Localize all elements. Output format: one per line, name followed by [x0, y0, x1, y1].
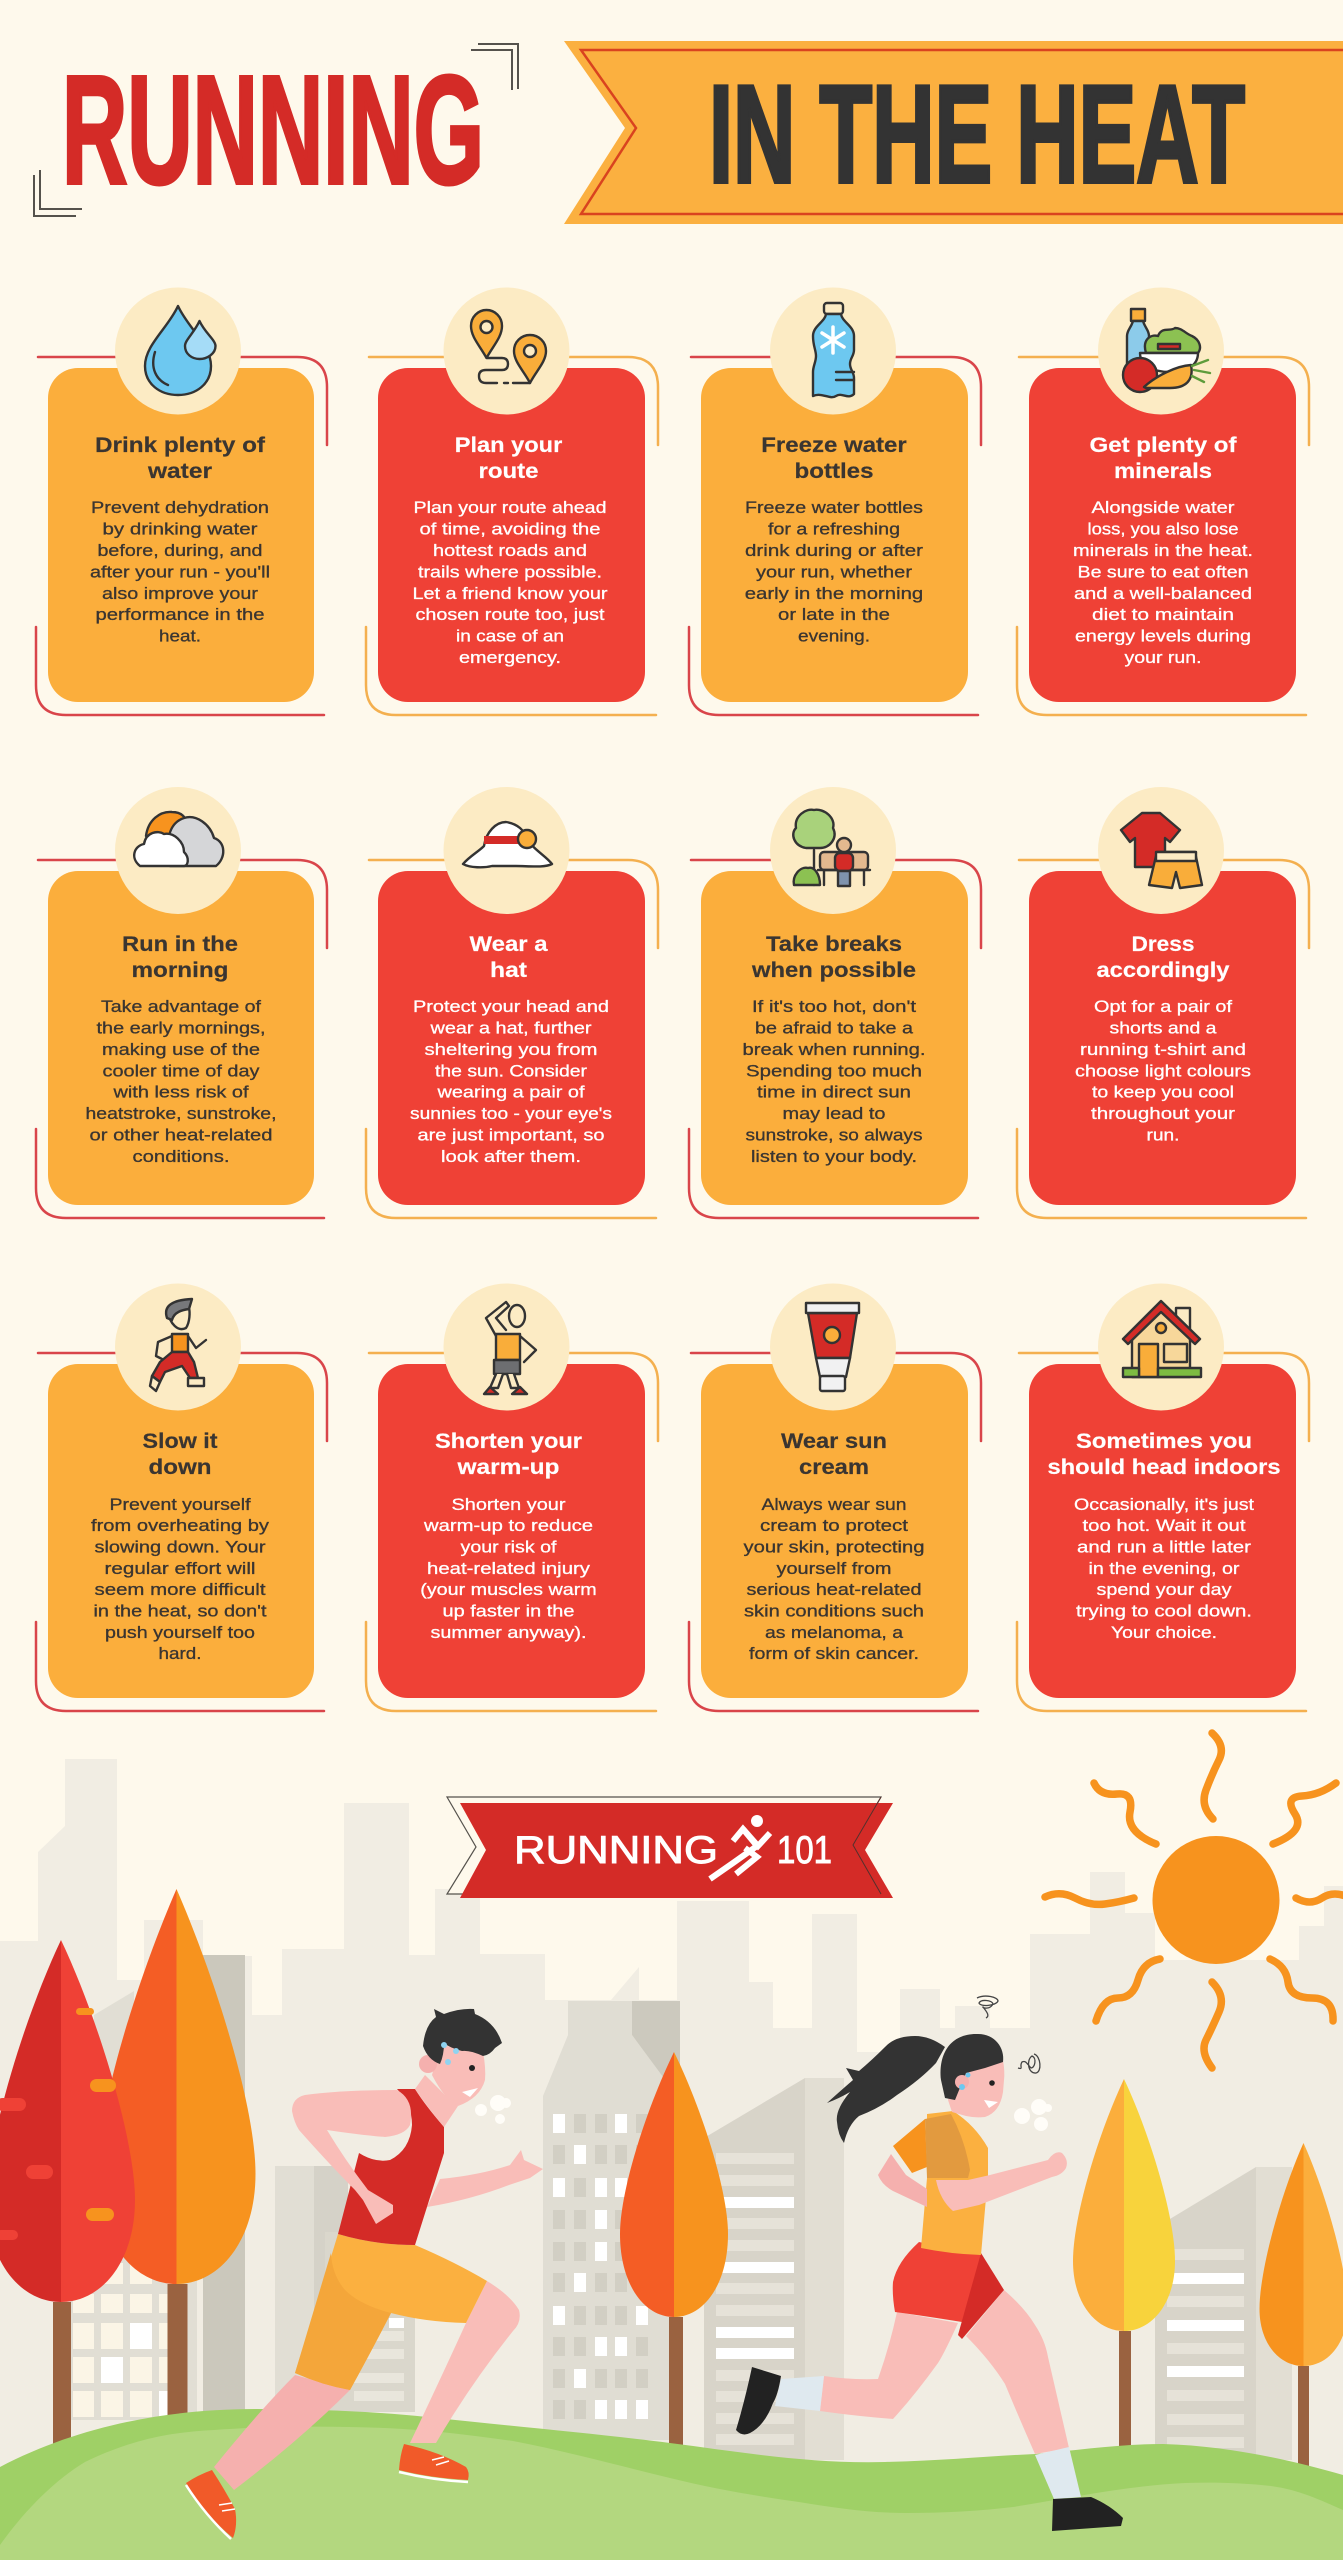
body text: Be sure to eat often	[1078, 564, 1248, 582]
body text: for a refreshing	[768, 520, 900, 538]
panel: wear a hat	[366, 787, 658, 1218]
body text	[1075, 998, 1251, 1144]
body text: Freeze water bottles	[745, 499, 923, 517]
body text: Alongside water	[1092, 499, 1235, 517]
panel: freeze water bottles	[689, 288, 981, 715]
body text	[420, 1496, 597, 1642]
body text: choose light colours	[1075, 1062, 1251, 1080]
body text: and a well-balanced	[1074, 585, 1252, 603]
body text: with less risk of	[112, 1084, 249, 1102]
icon: sun and clouds	[134, 812, 223, 866]
body text	[744, 1496, 924, 1663]
body text: also improve your	[102, 585, 259, 603]
neck and face	[948, 2060, 1004, 2117]
building: central tower with windows	[543, 2001, 680, 2440]
body text: in the heat, so don't	[94, 1602, 267, 1620]
body text: minerals in the heat.	[1073, 542, 1253, 560]
scene: city skyline	[0, 1759, 1343, 2500]
body text: hard.	[158, 1645, 202, 1663]
panel: shorten your warm-up	[366, 1284, 658, 1711]
body text	[745, 499, 924, 646]
body text: serious heat-related	[746, 1581, 922, 1599]
body text: seem more difficult	[94, 1581, 266, 1599]
tree: orange left	[98, 1889, 256, 2419]
body text: listen to your body.	[751, 1148, 917, 1166]
heading	[435, 1429, 583, 1479]
building: striped far right	[1155, 2167, 1292, 2460]
heading: should head indoors	[1048, 1455, 1281, 1479]
body text	[412, 499, 608, 667]
body text: performance in the	[96, 606, 264, 624]
body text: slowing down. Your	[94, 1538, 266, 1556]
body text	[742, 998, 926, 1166]
ponytail	[827, 2036, 945, 2143]
body text	[410, 998, 612, 1166]
body text: spend your day	[1096, 1581, 1232, 1599]
heading	[751, 932, 916, 982]
building: left with window grid	[70, 1955, 245, 2420]
icon: water drops	[145, 306, 216, 395]
body text: drink during or after	[745, 542, 924, 560]
heading	[455, 433, 563, 483]
back sock	[775, 2376, 824, 2411]
body text: Plan your route ahead	[414, 499, 606, 517]
body text: yourself from	[776, 1560, 892, 1578]
body text: loss, you also lose	[1088, 520, 1238, 538]
panel: run in the morning	[36, 787, 327, 1218]
icon: slow runner	[150, 1299, 206, 1391]
face details	[441, 2042, 478, 2097]
heading: morning	[132, 958, 228, 982]
body text: may lead to	[782, 1105, 886, 1123]
heading: Wear sun	[781, 1429, 887, 1453]
icon: t-shirt and shorts	[1121, 813, 1202, 888]
heading: water	[147, 459, 213, 483]
face details	[955, 2072, 998, 2108]
body text: as melanoma, a	[765, 1624, 904, 1642]
body text: conditions.	[132, 1148, 230, 1166]
title word: Running: RUNNING	[62, 44, 484, 216]
heading: Drink plenty of	[95, 433, 266, 457]
body text: the early mornings,	[96, 1020, 266, 1038]
back leg	[820, 2312, 958, 2419]
body text: chosen route too, just	[416, 606, 605, 624]
body text: Prevent dehydration	[91, 499, 269, 517]
body text: energy levels during	[1075, 628, 1251, 646]
heading: Run in the	[122, 932, 238, 956]
icon: stretching figure	[484, 1302, 536, 1394]
body text: your risk of	[460, 1538, 557, 1556]
shirt	[921, 2111, 988, 2255]
body text: If it's too hot, don't	[752, 998, 916, 1016]
body text: Opt for a pair of	[1094, 998, 1232, 1016]
heading: minerals	[1114, 459, 1212, 483]
front leg	[410, 2281, 520, 2443]
body text: regular effort will	[104, 1560, 256, 1578]
back arm	[427, 2150, 543, 2207]
heading: Wear a	[470, 932, 549, 956]
body text	[86, 998, 276, 1166]
shorts	[893, 2242, 981, 2322]
title block: Running in the heat	[34, 41, 1343, 224]
body text	[1074, 1496, 1254, 1642]
front shoe	[1052, 2497, 1123, 2531]
back shoe	[736, 2367, 781, 2434]
sleeves	[893, 2119, 927, 2173]
body text: heat.	[159, 628, 201, 646]
body text: making use of the	[102, 1041, 260, 1059]
heading: warm-up	[456, 1455, 560, 1479]
female runner	[736, 1996, 1123, 2531]
body text: wearing a pair of	[436, 1084, 585, 1102]
body text: warm-up to reduce	[423, 1517, 593, 1535]
heading: bottles	[794, 459, 874, 483]
banner: Running 101 logo	[447, 1797, 893, 1898]
singlet	[338, 2089, 444, 2245]
body text: early in the morning	[745, 585, 923, 603]
heading: cream	[799, 1455, 869, 1479]
heading	[142, 1429, 218, 1479]
panel: take breaks when possible	[689, 787, 981, 1218]
body text: emergency.	[459, 649, 561, 667]
logo wordmark: RUNNING	[514, 1829, 718, 1872]
icon: water bottle	[813, 303, 854, 397]
body text: running t-shirt and	[1080, 1041, 1246, 1059]
male runner	[186, 2009, 543, 2539]
front arm	[292, 2090, 411, 2224]
body text	[91, 1496, 270, 1663]
body text: Protect your head and	[413, 998, 609, 1016]
body text: break when running.	[742, 1041, 926, 1059]
ribbon banner	[564, 41, 1343, 224]
panel: dress accordingly	[1017, 787, 1309, 1218]
tree: far right	[1260, 2143, 1343, 2466]
body text: or other heat-related	[90, 1126, 272, 1144]
body text: the sun. Consider	[435, 1062, 588, 1080]
body text: sheltering you from	[424, 1041, 598, 1059]
heading: Take breaks	[766, 932, 902, 956]
heading: accordingly	[1096, 958, 1230, 982]
heading: Shorten your	[435, 1429, 583, 1453]
panel: get plenty of minerals	[1017, 288, 1309, 715]
front arm	[936, 2152, 1067, 2211]
body text: trails where possible.	[418, 564, 602, 582]
body text: Shorten your	[452, 1496, 566, 1514]
panel: slow it down	[36, 1284, 327, 1711]
heading: Slow it	[142, 1429, 218, 1453]
heading: hat	[490, 958, 527, 982]
body text: too hot. Wait it out	[1082, 1517, 1246, 1535]
body text: diet to maintain	[1092, 606, 1234, 624]
icon: food and bottle	[1123, 309, 1210, 392]
icon: house	[1123, 1301, 1201, 1377]
front leg	[966, 2290, 1069, 2454]
body text: in the evening, or	[1088, 1560, 1240, 1578]
body text: sunstroke, so always	[746, 1126, 922, 1144]
heading	[781, 1429, 887, 1479]
logo number: 101	[777, 1829, 832, 1872]
body text: by drinking water	[102, 520, 258, 538]
body text: (your muscles warm	[420, 1581, 597, 1599]
panel: plan your route	[366, 288, 658, 715]
body text: Let a friend know your	[412, 585, 608, 603]
building: striped right of centre	[704, 2078, 844, 2460]
shorts	[295, 2234, 487, 2390]
heading: when possible	[751, 958, 916, 982]
body text: run.	[1146, 1126, 1180, 1144]
sun with wavy rays	[1045, 1733, 1343, 2068]
neck and head	[415, 2075, 458, 2127]
body text: to keep you cool	[1092, 1084, 1234, 1102]
heading: down	[148, 1455, 212, 1479]
icon: sun hat	[463, 822, 552, 867]
body text: Your choice.	[1111, 1624, 1217, 1642]
body text: Take advantage of	[101, 998, 261, 1016]
panel: sometimes you should head indoors	[1017, 1284, 1309, 1711]
body text: cooler time of day	[102, 1062, 260, 1080]
heading: Plan your	[455, 433, 563, 457]
back arm	[878, 2154, 927, 2207]
body text: in case of an	[456, 628, 564, 646]
body text: sunnies too - your eye's	[410, 1105, 612, 1123]
body text: are just important, so	[418, 1126, 604, 1144]
body text	[1073, 499, 1253, 667]
body text: trying to cool down.	[1076, 1602, 1252, 1620]
heading: Get plenty of	[1090, 433, 1237, 457]
back leg	[214, 2375, 350, 2490]
dizzy swirl marks	[977, 1996, 1040, 2073]
body text: after your run - you'll	[90, 564, 270, 582]
panel: wear sun cream	[689, 1284, 981, 1711]
heading	[470, 932, 549, 982]
body text: of time, avoiding the	[420, 520, 600, 538]
heading	[1090, 433, 1237, 483]
body text: Spending too much	[746, 1062, 922, 1080]
icon: person on park bench	[793, 810, 870, 886]
breath puffs	[1014, 2099, 1052, 2131]
body text: wear a hat, further	[429, 1020, 592, 1038]
tree: red left	[0, 1940, 135, 2452]
icon: running figure	[710, 1818, 770, 1879]
hair	[941, 2034, 1003, 2100]
heading	[122, 932, 238, 982]
body text: hottest roads and	[433, 542, 587, 560]
body text: your run, whether	[756, 564, 913, 582]
body text: skin conditions such	[744, 1602, 924, 1620]
heading	[761, 433, 907, 483]
grass hills	[0, 2409, 1343, 2560]
heading: Dress	[1132, 932, 1195, 956]
body text: form of skin cancer.	[749, 1645, 919, 1663]
heading: Sometimes you	[1076, 1429, 1252, 1453]
body text: heat-related injury	[427, 1560, 591, 1578]
icon: route pins	[471, 310, 546, 383]
body text: or late in the	[778, 606, 890, 624]
heading	[95, 433, 266, 483]
body text: before, during, and	[98, 542, 262, 560]
body text: Always wear sun	[762, 1496, 906, 1514]
icon: sun cream tube	[806, 1303, 859, 1391]
body text: your skin, protecting	[744, 1538, 924, 1556]
tree: yellow	[1073, 2079, 1175, 2451]
heading	[1096, 932, 1230, 982]
body text: cream to protect	[760, 1517, 909, 1535]
breath puffs	[475, 2095, 511, 2124]
body text: summer anyway).	[430, 1624, 586, 1642]
body text	[90, 499, 270, 646]
body text: push yourself too	[105, 1624, 255, 1642]
body text: evening.	[798, 628, 870, 646]
body text: Prevent yourself	[110, 1496, 251, 1514]
tree: centre orange	[620, 2052, 728, 2452]
hair	[423, 2009, 502, 2064]
body text: look after them.	[441, 1148, 581, 1166]
body text: Occasionally, it's just	[1074, 1496, 1254, 1514]
body text: your run.	[1124, 649, 1202, 667]
body text: from overheating by	[91, 1517, 270, 1535]
heading: Freeze water	[761, 433, 907, 457]
heading: route	[478, 459, 539, 483]
corner brackets	[34, 44, 518, 216]
panel: drink plenty of water	[36, 288, 327, 715]
building: small middle with stripes	[275, 2166, 415, 2412]
body text: be afraid to take a	[755, 1020, 914, 1038]
shoes	[399, 2444, 469, 2480]
body text: shorts and a	[1110, 1020, 1217, 1038]
body text: throughout your	[1091, 1105, 1236, 1123]
body text: and run a little later	[1077, 1538, 1252, 1556]
body text: up faster in the	[442, 1602, 574, 1620]
body text: heatstroke, sunstroke,	[86, 1105, 276, 1123]
body text: time in direct sun	[757, 1084, 911, 1102]
heading	[1048, 1429, 1281, 1479]
icon detail: snowflake	[822, 327, 844, 353]
front sock	[1035, 2447, 1081, 2499]
